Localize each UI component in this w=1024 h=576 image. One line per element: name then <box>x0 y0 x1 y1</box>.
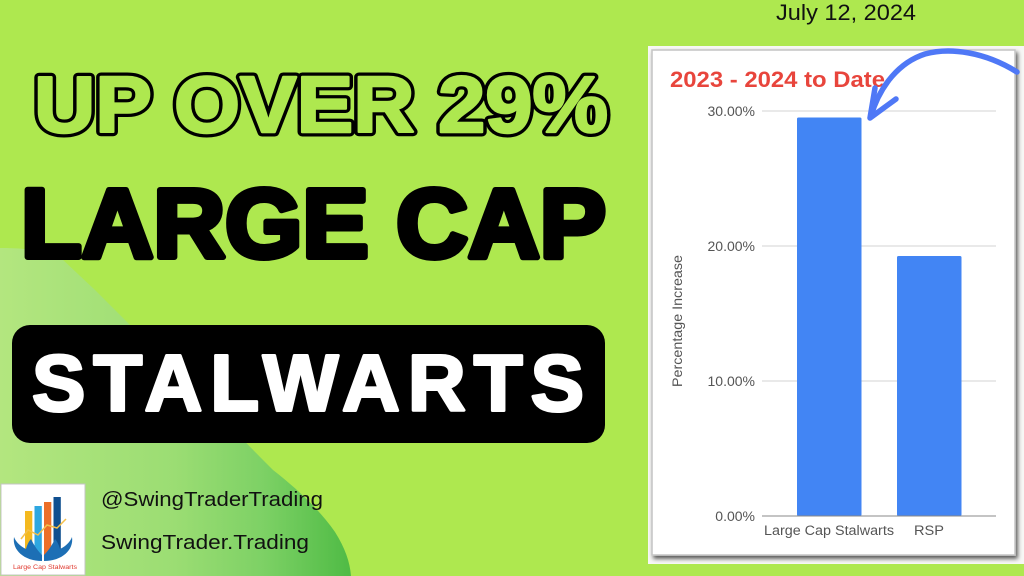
x axis labels: Large Cap Stalwarts <box>764 523 894 538</box>
handle text: @SwingTraderTrading <box>101 488 323 511</box>
y axis labels: 20.00% <box>708 238 755 254</box>
y axis labels <box>708 103 755 524</box>
chart panel <box>652 50 1015 555</box>
heading: up over 29%: UP OVER 29% <box>34 60 608 149</box>
stalwarts banner <box>12 325 605 443</box>
gridlines <box>762 111 996 381</box>
logo trend line <box>21 519 66 539</box>
heading: large cap: LARGE CAP <box>21 169 606 278</box>
decorative gradient wave <box>0 248 351 576</box>
logo bars <box>25 497 61 555</box>
heading: up over 29%: UP OVER 29% <box>34 60 608 149</box>
x axis labels <box>764 523 944 538</box>
chart panel backing <box>648 46 1024 564</box>
y axis title: Percentage Increase <box>669 255 685 387</box>
bar: rsp <box>897 256 962 516</box>
x axis labels: RSP <box>914 523 944 538</box>
y axis labels: 0.00% <box>715 508 755 524</box>
bar: large cap stalwarts <box>797 118 862 516</box>
baseline <box>762 515 996 517</box>
banner text: STALWARTS <box>32 338 584 428</box>
y axis labels: 30.00% <box>708 103 755 119</box>
logo caption: Large Cap Stalwarts <box>13 564 77 571</box>
website text: SwingTrader.Trading <box>101 531 309 554</box>
y axis labels: 10.00% <box>708 373 755 389</box>
arrow pointing to bar <box>870 51 1017 118</box>
logo: large cap stalwarts <box>1 484 85 575</box>
date label: July 12, 2024 <box>776 0 916 25</box>
chart title: 2023 - 2024 to Date <box>670 67 885 92</box>
logo hands <box>14 537 72 561</box>
